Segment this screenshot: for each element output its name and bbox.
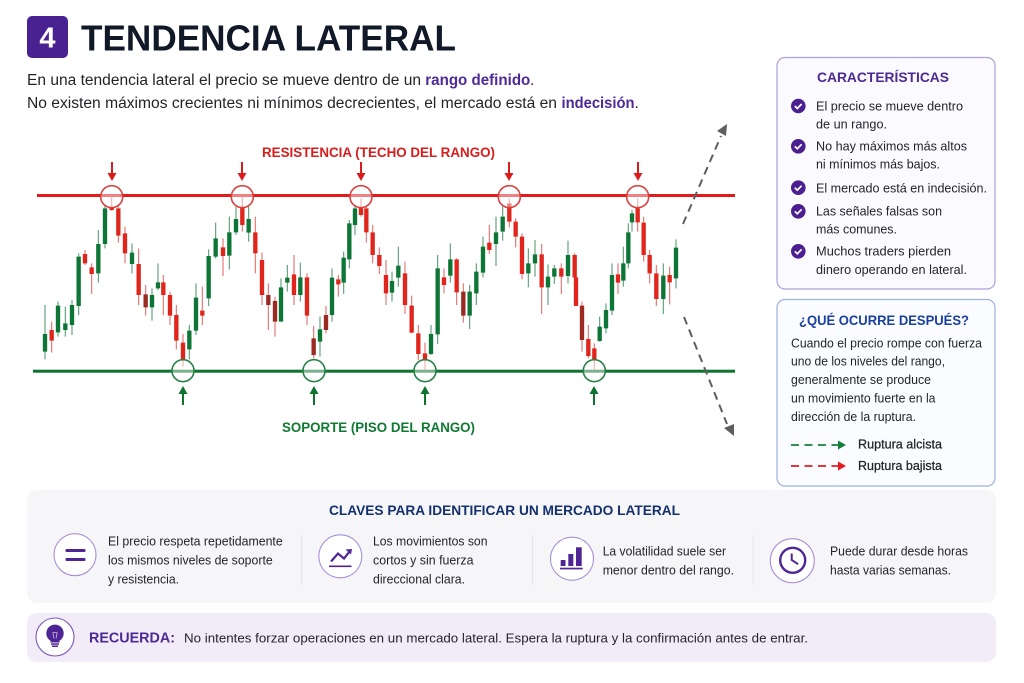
legend: bearish breakout: Ruptura bajista [858, 459, 942, 473]
reminder text: No intentes forzar operaciones en un mercado lateral. Espera la ruptura y la confirmación antes de entrar. [184, 630, 808, 646]
resistance touch circles [101, 186, 649, 208]
key text: movements: direccional clara. [373, 573, 465, 587]
candles: right section [392, 198, 676, 370]
intro text [27, 72, 639, 112]
panel: características [777, 58, 995, 289]
legend: bearish breakout [791, 459, 942, 473]
characteristics list: más comunes. [816, 222, 897, 236]
intro text: . [530, 72, 534, 89]
key text: duration [830, 545, 968, 578]
resistance line [37, 194, 735, 197]
intro text: indecisión [562, 95, 634, 112]
characteristics list: Muchos traders pierden [816, 245, 951, 259]
icon: light bulb [36, 618, 74, 656]
intro text: rango definido [425, 72, 530, 89]
intro text: En una tendencia lateral el precio se mueve dentro de un [27, 72, 421, 89]
key text: volatility [603, 545, 734, 578]
legend: bullish breakout: Ruptura alcista [858, 438, 942, 452]
reminder label: RECUERDA: [89, 631, 175, 647]
explanation text [791, 336, 982, 424]
icon: clock [770, 539, 814, 583]
candles: left section [45, 197, 386, 367]
check icons [791, 99, 806, 259]
panel: qué ocurre después [777, 300, 995, 486]
key text: levels [108, 535, 283, 587]
panel heading: CLAVES PARA IDENTIFICAR UN MERCADO LATERAL [329, 502, 680, 518]
support label: SOPORTE (PISO DEL RANGO) [282, 420, 475, 435]
intro text: No existen máximos crecientes ni mínimos decrecientes, el mercado está en [27, 95, 557, 112]
key text: movements [373, 535, 488, 587]
explanation text: dirección de la ruptura. [791, 410, 916, 424]
title: TENDENCIA LATERAL [81, 18, 456, 59]
explanation text: uno de los niveles del rango, [791, 355, 945, 369]
breakout up arrow [683, 124, 727, 224]
key text: duration: Puede durar desde horas [830, 545, 968, 559]
key text: levels: y resistencia. [108, 573, 179, 587]
support line [33, 370, 735, 373]
characteristics list: El precio se mueve dentro [816, 100, 963, 114]
key text: movements: Los movimientos son [373, 535, 488, 549]
key text: levels: El precio respeta repetidamente [108, 535, 283, 549]
characteristics list: ni mínimos más bajos. [816, 158, 940, 172]
breakdown arrow [684, 317, 734, 436]
number badge: 4 [39, 22, 56, 54]
green up arrows [178, 386, 598, 405]
explanation text: un movimiento fuerte en la [791, 392, 936, 406]
characteristics list [816, 100, 987, 277]
characteristics list: Las señales falsas son [816, 204, 942, 218]
key text: movements: cortos y sin fuerza [373, 554, 474, 568]
resistance label: RESISTENCIA (TECHO DEL RANGO) [262, 145, 495, 160]
key text: volatility: La volatilidad suele ser [603, 545, 726, 559]
explanation text: Cuando el precio rompe con fuerza [791, 336, 982, 350]
characteristics list: dinero operando en lateral. [816, 263, 967, 277]
panel heading: ¿QUÉ OCURRE DESPUÉS? [799, 312, 969, 328]
characteristics list: El mercado está en indecisión. [816, 182, 987, 196]
key text: duration: hasta varias semanas. [830, 564, 951, 578]
candlestick chart [45, 197, 676, 370]
panel: recuerda [27, 613, 996, 662]
key text: levels: los mismos niveles de soporte [108, 554, 273, 568]
red down arrows [108, 162, 642, 181]
icon: bars [550, 537, 594, 580]
panel heading: CARACTERÍSTICAS [817, 69, 949, 85]
characteristics list: No hay máximos más altos [816, 140, 967, 154]
intro text: . [634, 95, 639, 112]
icon: equal levels [54, 534, 96, 576]
characteristics list: de un rango. [816, 118, 887, 132]
key text: volatility: menor dentro del rango. [603, 564, 734, 578]
icon: trend line [319, 535, 362, 578]
support touch circles [172, 360, 605, 382]
explanation text: generalmente se produce [791, 373, 931, 387]
panel: claves [27, 490, 996, 603]
legend: bullish breakout [791, 438, 942, 452]
number badge [27, 16, 68, 58]
